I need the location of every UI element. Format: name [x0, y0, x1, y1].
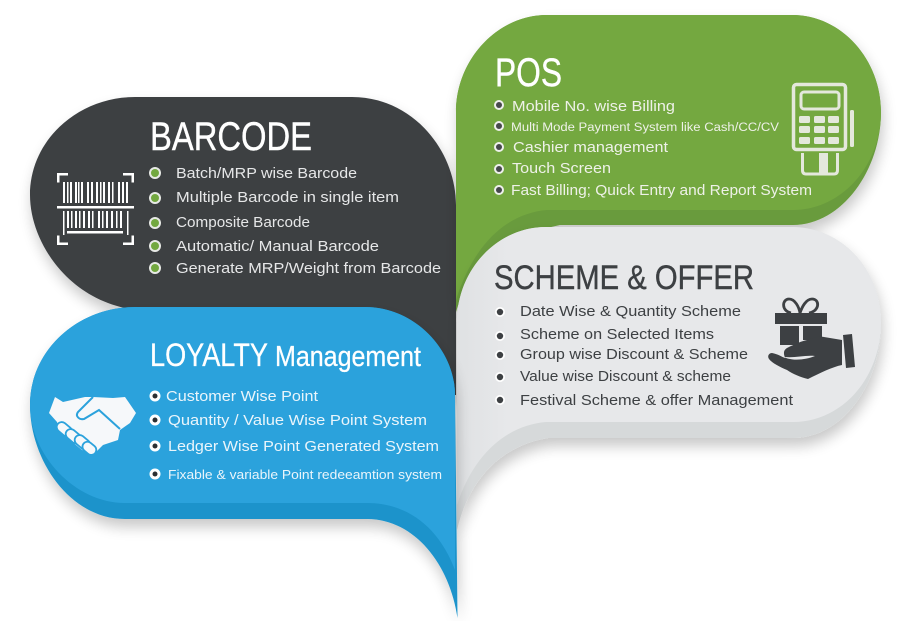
list: pos features: Multi Mode Payment System like Cash/CC/CV	[511, 122, 779, 134]
list: scheme features: Scheme on Selected Items	[520, 326, 714, 343]
list: loyalty features: Customer Wise Point	[166, 388, 319, 405]
list: scheme features: Group wise Discount & Scheme	[520, 346, 748, 363]
list: barcode features: Automatic/ Manual Barcode	[176, 238, 379, 255]
list: pos features: Touch Screen	[512, 160, 611, 177]
panel: scheme and offer	[457, 227, 881, 530]
icon: handshake	[49, 397, 136, 457]
list: pos features: Cashier management	[513, 139, 669, 156]
list: loyalty features: Fixable & variable Point redeeamtion system	[168, 467, 442, 482]
list: barcode features: Composite Barcode	[176, 214, 310, 231]
list: barcode features: Batch/MRP wise Barcode	[176, 165, 357, 182]
heading: loyalty management	[150, 337, 421, 373]
panel: loyalty management	[30, 307, 458, 618]
list: loyalty features: Quantity / Value Wise Point System	[168, 412, 427, 429]
list: loyalty features	[150, 388, 442, 482]
list: pos features: Mobile No. wise Billing	[512, 98, 675, 115]
panel: pos	[456, 15, 881, 312]
heading: pos: POS	[495, 51, 562, 95]
heading: loyalty management: LOYALTY	[150, 337, 268, 373]
panel: barcode	[30, 97, 456, 395]
icon: barcode scanner	[57, 173, 134, 245]
list: pos features: Fast Billing; Quick Entry and Report System	[511, 182, 812, 199]
list: loyalty features: Ledger Wise Point Generated System	[168, 438, 439, 455]
list: scheme features: Value wise Discount & scheme	[520, 368, 731, 385]
heading: loyalty management: Management	[275, 341, 421, 373]
list: pos features	[494, 98, 812, 199]
heading: scheme and offer: SCHEME & OFFER	[494, 259, 754, 297]
heading: barcode: BARCODE	[150, 115, 312, 159]
list: barcode features	[149, 165, 441, 277]
list: scheme features: Date Wise & Quantity Scheme	[520, 303, 741, 320]
icon: card payment terminal	[794, 84, 854, 174]
list: scheme features	[495, 303, 794, 409]
list: scheme features: Festival Scheme & offer Management	[520, 392, 794, 409]
list: barcode features: Generate MRP/Weight from Barcode	[176, 260, 441, 277]
list: barcode features: Multiple Barcode in single item	[176, 189, 399, 206]
icon: hand holding gift	[768, 299, 855, 379]
